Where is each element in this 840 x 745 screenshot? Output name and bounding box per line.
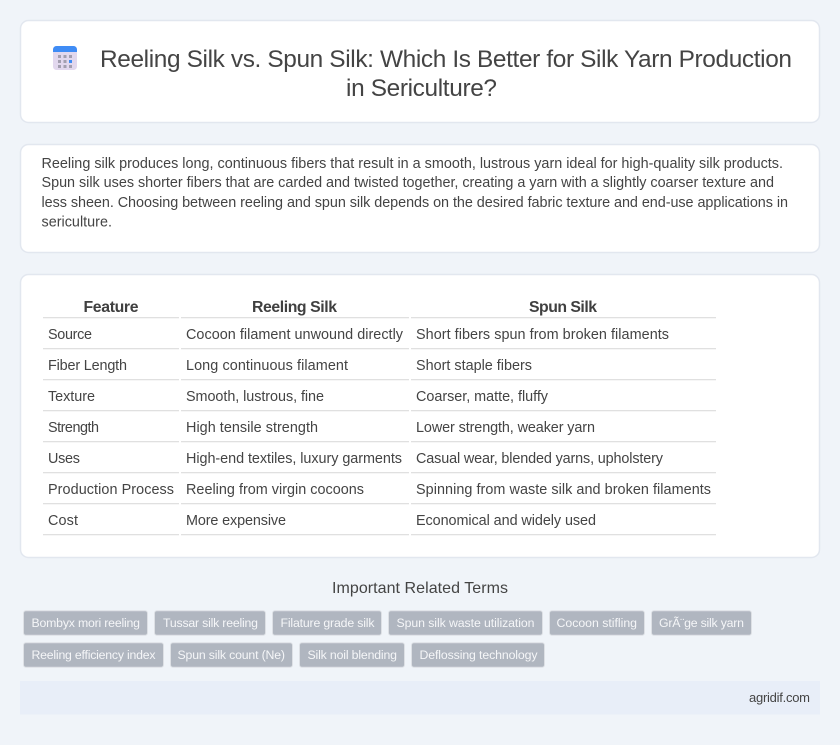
table row: fiber length: Fiber Length [48,358,127,374]
icon: calendar [53,46,77,70]
table row: cost: Economical and widely used [416,513,596,529]
tag [652,611,752,635]
table row: strength [48,420,595,436]
tag [272,611,382,635]
table header [84,299,597,316]
table row: fiber length [48,358,532,374]
table row: texture [48,389,549,405]
table row: production process: Production Process [48,482,174,498]
tag: Cocoon stifling [556,616,637,630]
panel: title header [20,20,820,122]
tag: GrÃ¨ge silk yarn [659,616,744,630]
tag: Filature grade silk [280,616,375,630]
tag: Silk noil blending [308,648,397,662]
heading: important related terms: Important Related Terms [332,580,508,597]
table row: source: Cocoon filament unwound directly [186,327,404,343]
table header: Spun Silk [529,299,597,316]
tag [24,643,164,667]
table header: Feature [84,299,139,316]
tag [412,643,544,667]
table row: production process: Reeling from virgin cocoons [186,482,364,498]
tags: related terms [24,611,752,667]
title: in Sericulture? [346,75,497,102]
tag: Bombyx mori reeling [32,616,140,630]
table row: texture: Smooth, lustrous, fine [186,389,324,405]
title: Reeling Silk vs. Spun Silk: Which Is Better for Silk Yarn Production [100,46,792,73]
tag [550,611,644,635]
table row: source: Short fibers spun from broken filaments [416,327,669,343]
text block: introduction: Reeling silk produces long, continuous fibers that result in a smooth, lustrous yarn ideal for high-quality silk products. [42,156,783,172]
table row: production process: Spinning from waste silk and broken filaments [416,482,711,498]
text block: introduction: less sheen. Choosing between reeling and spun silk depends on the desired fabric texture and end-use applications in [42,195,788,211]
table row: fiber length: Short staple fibers [416,358,532,374]
text block: introduction: sericulture. [42,214,112,230]
table row: cost: Cost [48,513,78,529]
tag [154,611,266,635]
table row: source: Source [48,327,92,343]
table row: uses: Uses [48,451,80,467]
text block: introduction: Spun silk uses shorter fibers that are carded and twisted together, creating a yarn with a slightly coarser texture and [42,175,774,191]
tag [24,611,148,635]
tag: Spun silk waste utilization [396,616,535,630]
footer source: agridif.com [749,690,810,705]
tag [170,643,292,667]
table row: production process [48,482,711,498]
table row: cost: More expensive [186,513,286,529]
table row: texture: Coarser, matte, fluffy [416,389,549,405]
table row: strength: Lower strength, weaker yarn [416,420,595,436]
table header: Reeling Silk [252,299,337,316]
tag [300,643,404,667]
panel: introduction [20,144,820,252]
table row: texture: Texture [48,389,95,405]
table row: cost [48,513,596,529]
tag: Deflossing technology [420,648,538,662]
table row: uses: Casual wear, blended yarns, upholstery [416,451,664,467]
title [100,46,792,102]
tag: Reeling efficiency index [32,648,156,662]
table row: uses [48,451,664,467]
table row: uses: High-end textiles, luxury garments [186,451,402,467]
tag [388,611,542,635]
panel: comparison table [20,274,820,558]
footer bar [20,681,820,714]
table row: strength: High tensile strength [186,420,318,436]
table row: source [48,327,669,343]
tag: Spun silk count (Ne) [178,648,285,662]
table row: strength: Strength [48,420,99,436]
tag: Tussar silk reeling [163,616,258,630]
text block: introduction [42,156,788,230]
table row: fiber length: Long continuous filament [186,358,348,374]
